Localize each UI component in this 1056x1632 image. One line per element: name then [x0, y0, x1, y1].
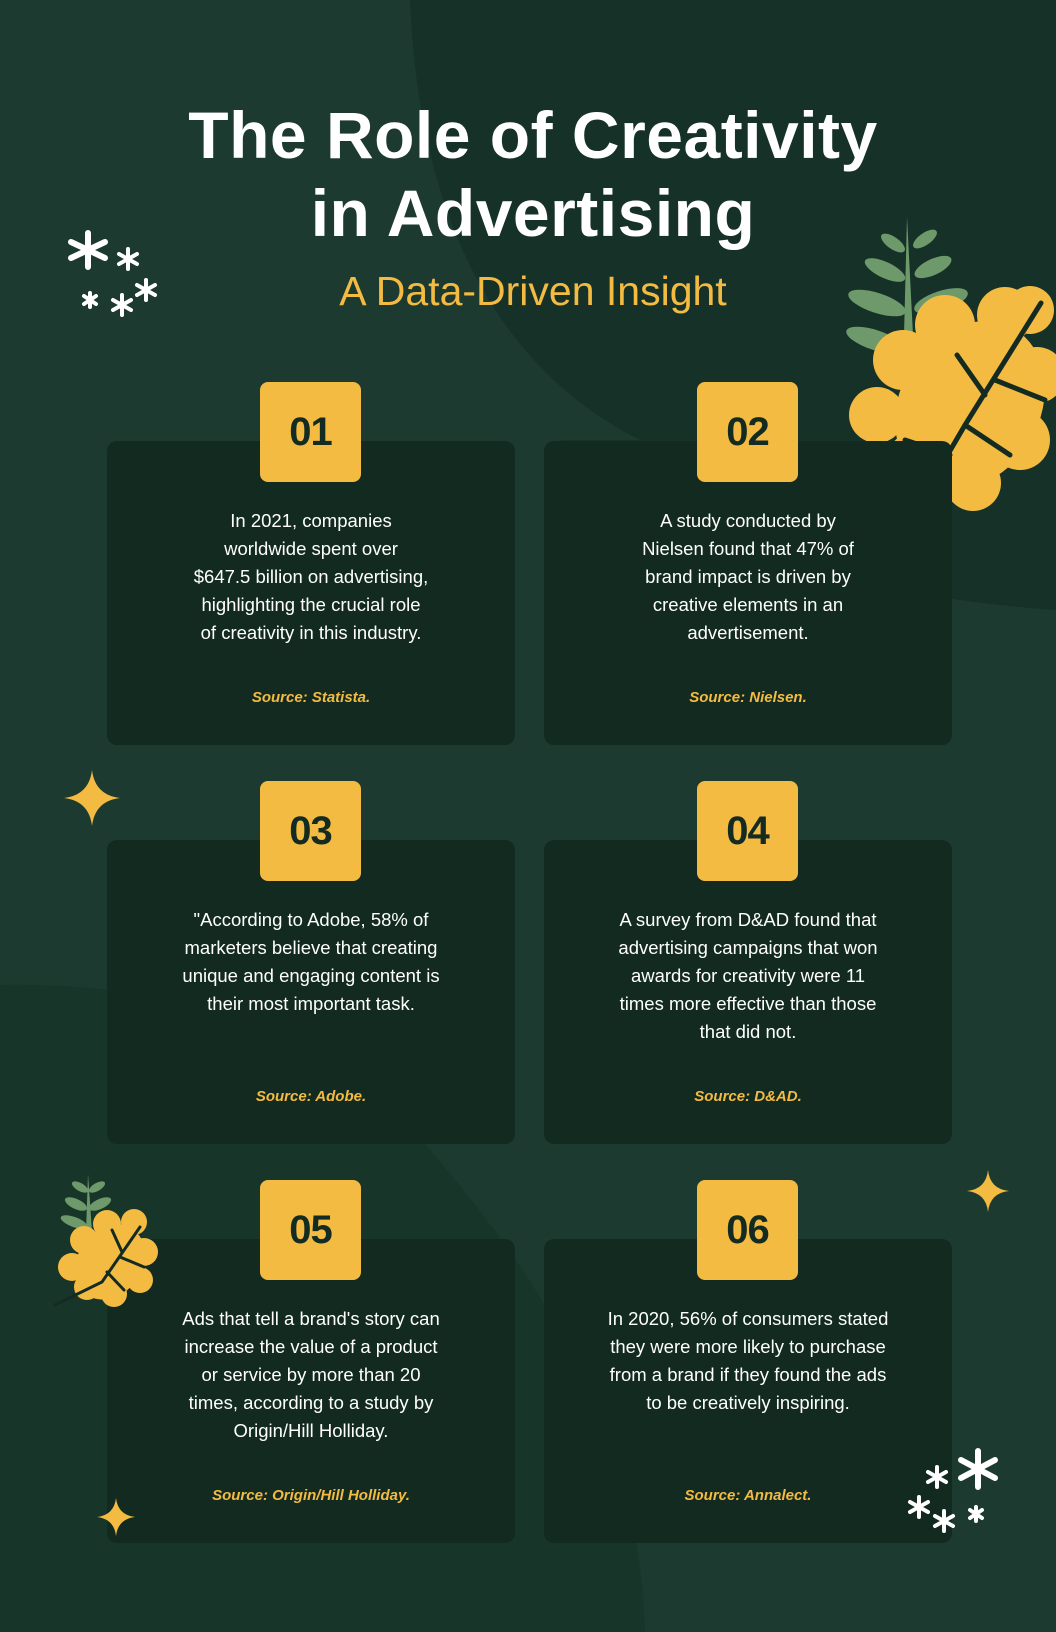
- badge 03: [260, 781, 361, 881]
- text 4: [618, 909, 878, 1042]
- badge 06: [697, 1180, 798, 1280]
- text 5: times, according to a study by: [189, 1392, 433, 1413]
- text 6: from a brand if they found the ads: [610, 1364, 886, 1385]
- text 6: In 2020, 56% of consumers stated: [608, 1308, 888, 1329]
- text 3: [182, 909, 440, 1014]
- text 3: marketers believe that creating: [185, 937, 437, 958]
- source 3: Source: Adobe.: [256, 1088, 366, 1105]
- text 4: awards for creativity were 11: [631, 965, 865, 986]
- badge 02: [697, 382, 798, 482]
- subtitle: A Data-Driven Insight: [339, 268, 727, 314]
- card 1: [107, 382, 515, 745]
- text 4: A survey from D&AD found that: [619, 909, 877, 930]
- text 1: [194, 510, 428, 643]
- text 5: Ads that tell a brand's story can: [182, 1308, 440, 1329]
- badge 05: [260, 1180, 361, 1280]
- title: The Role of Creativity: [188, 98, 878, 172]
- text 5: [182, 1308, 440, 1441]
- title: [188, 98, 878, 250]
- text 5: increase the value of a product: [184, 1336, 438, 1357]
- text 2: advertisement.: [687, 622, 809, 643]
- text 4: that did not.: [700, 1021, 796, 1042]
- icon: snowflakes top-left: [68, 230, 158, 317]
- text 1: worldwide spent over: [224, 538, 398, 559]
- card 6: [544, 1180, 952, 1543]
- text 3: "According to Adobe, 58% of: [194, 909, 428, 930]
- icon: sparkle bottom-left: [97, 1498, 135, 1536]
- badge 04: [697, 781, 798, 881]
- source 2: Source: Nielsen.: [689, 689, 807, 706]
- badge 01: [260, 382, 361, 482]
- icon: snowflakes bottom-right: [908, 1448, 998, 1533]
- text 2: A study conducted by: [660, 510, 836, 531]
- badge 03: 03: [289, 809, 332, 853]
- card 4: [544, 781, 952, 1144]
- card 3: [107, 781, 515, 1144]
- source 1: Source: Statista.: [252, 689, 370, 706]
- text 1: of creativity in this industry.: [201, 622, 421, 643]
- text 5: or service by more than 20: [201, 1364, 421, 1385]
- badge 06: 06: [726, 1208, 769, 1252]
- title: in Advertising: [311, 176, 755, 250]
- text 3: their most important task.: [207, 993, 415, 1014]
- text 1: In 2021, companies: [230, 510, 392, 531]
- text 6: they were more likely to purchase: [610, 1336, 886, 1357]
- card 5: [107, 1180, 515, 1543]
- badge 04: 04: [726, 809, 769, 853]
- text 4: times more effective than those: [620, 993, 876, 1014]
- source 6: Source: Annalect.: [684, 1487, 811, 1504]
- text 2: creative elements in an: [653, 594, 843, 615]
- source 4: Source: D&AD.: [694, 1088, 802, 1105]
- badge 01: 01: [289, 410, 332, 454]
- text 6: [608, 1308, 888, 1413]
- icon: small leaf left: [54, 1174, 158, 1307]
- card 2: [544, 382, 952, 745]
- text 5: Origin/Hill Holliday.: [234, 1420, 388, 1441]
- icon: sparkle left: [64, 770, 120, 826]
- icon: leaves top-right: [846, 218, 1056, 511]
- badge 05: 05: [289, 1208, 332, 1252]
- text 4: advertising campaigns that won: [618, 937, 878, 958]
- text 1: $647.5 billion on advertising,: [194, 566, 428, 587]
- text 2: [642, 510, 854, 643]
- text 2: brand impact is driven by: [645, 566, 851, 587]
- badge 02: 02: [726, 410, 769, 454]
- text 6: to be creatively inspiring.: [646, 1392, 850, 1413]
- icon: sparkle right: [967, 1170, 1009, 1212]
- text 3: unique and engaging content is: [182, 965, 440, 986]
- text 1: highlighting the crucial role: [201, 594, 421, 615]
- text 2: Nielsen found that 47% of: [642, 538, 854, 559]
- source 5: Source: Origin/Hill Holliday.: [212, 1487, 410, 1504]
